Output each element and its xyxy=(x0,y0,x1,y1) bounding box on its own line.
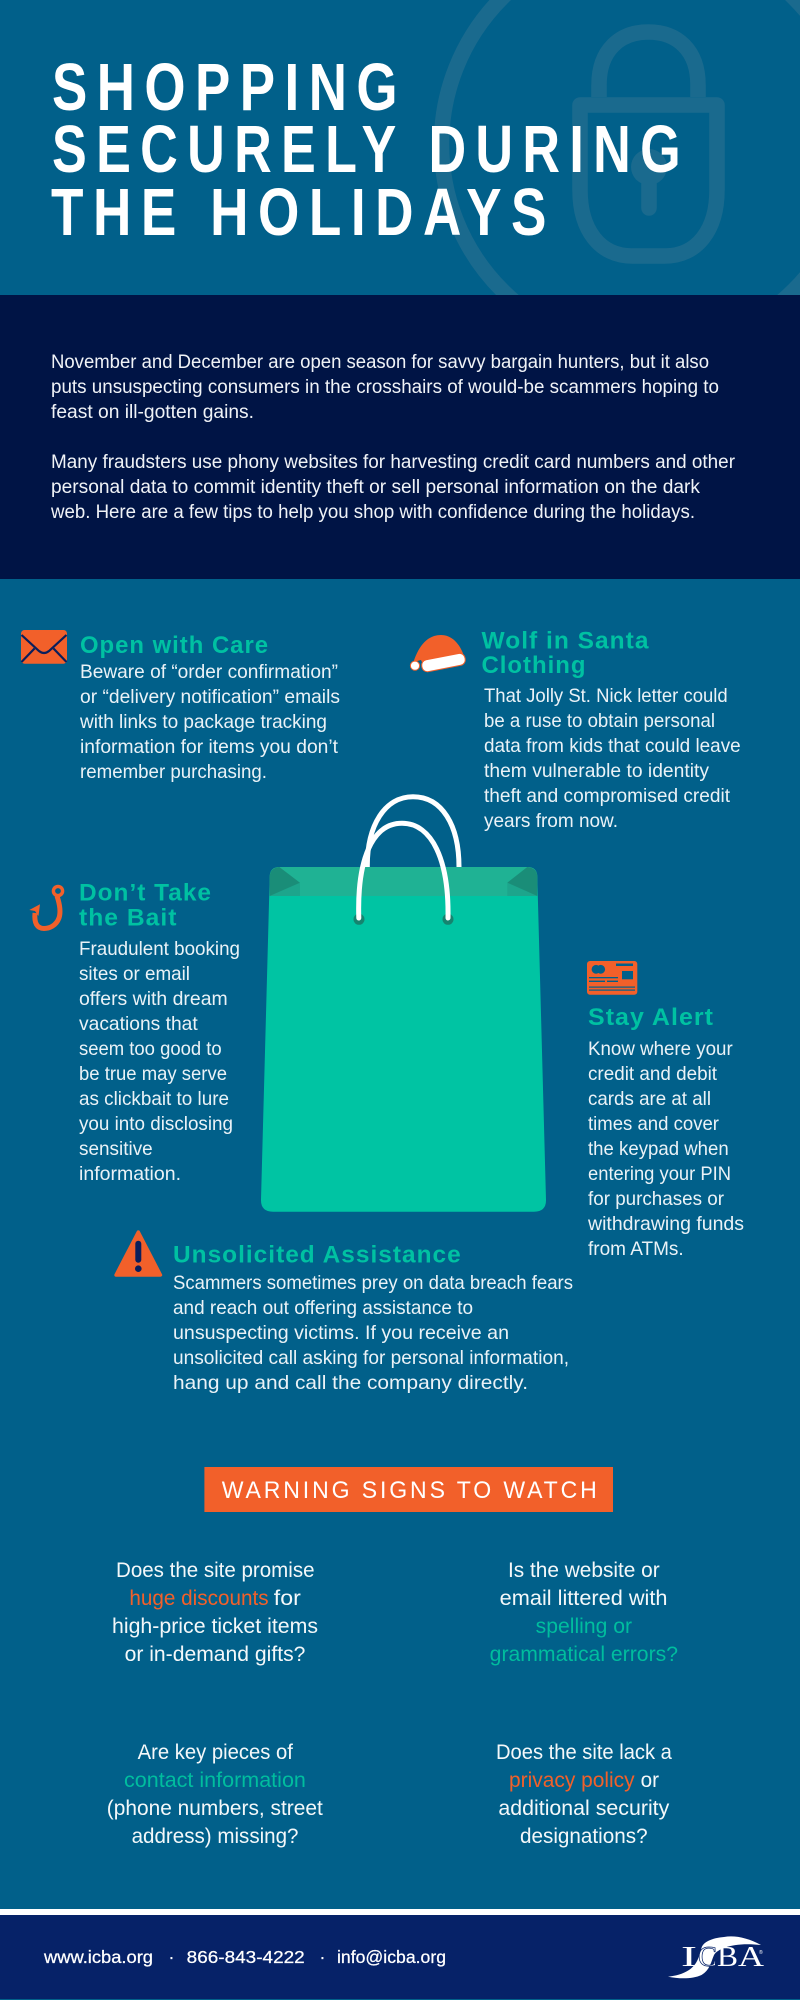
contact details: · xyxy=(168,1947,174,1967)
warning sign: huge discounts: high-price ticket items xyxy=(112,1615,318,1638)
text block: intro paragraph one: November and December are open season for savvy bargain hunters, but it also xyxy=(51,352,709,373)
text block: or “delivery notification” emails xyxy=(80,686,340,708)
title: SHOPPING xyxy=(52,50,407,125)
warning sign: privacy policy: Does the site lack a xyxy=(496,1741,672,1764)
text block: theft and compromised credit xyxy=(484,785,731,807)
text block: years from now. xyxy=(484,810,618,832)
warning sign: privacy policy: or xyxy=(641,1769,659,1792)
title xyxy=(51,50,690,250)
text block: be true may serve xyxy=(79,1063,227,1085)
text block: information for items you don’t xyxy=(80,736,339,758)
warning sign: huge discounts xyxy=(112,1559,318,1666)
text block: information. xyxy=(79,1163,181,1185)
text block: and reach out offering assistance to xyxy=(173,1297,473,1319)
warning sign: huge discounts: Does the site promise xyxy=(116,1559,314,1582)
warning sign: huge discounts: huge discounts xyxy=(129,1587,269,1610)
banner: warning signs to watch xyxy=(204,1467,613,1512)
text block: intro paragraph two xyxy=(50,452,736,523)
text block: offers with dream xyxy=(79,988,228,1010)
heading: Wolf in Santa xyxy=(482,628,650,654)
panel: introduction xyxy=(0,295,800,579)
heading xyxy=(482,628,650,679)
warning sign: spelling errors: spelling or xyxy=(536,1615,632,1638)
panel: unsolicited assistance xyxy=(116,1232,573,1394)
text block: intro paragraph two: Many fraudsters use phony websites for harvesting credit card numbers and other xyxy=(51,452,736,473)
warning sign: contact information: address) missing? xyxy=(132,1825,298,1848)
icon: warning triangle xyxy=(116,1232,160,1275)
text block: vacations that xyxy=(79,1013,198,1035)
warning sign: spelling errors: email littered with xyxy=(500,1587,668,1610)
text block: intro paragraph two: web. Here are a few tips to help you shop with confidence during the holidays. xyxy=(50,502,695,523)
warning sign: privacy policy: designations? xyxy=(520,1825,648,1848)
text block: for purchases or xyxy=(588,1188,724,1210)
text block xyxy=(484,685,741,832)
warning sign: privacy policy: additional security xyxy=(498,1797,670,1820)
contact details xyxy=(43,1947,446,1967)
panel: stay alert xyxy=(587,961,744,1260)
text block xyxy=(79,661,340,783)
heading: Open with Care xyxy=(80,632,269,659)
icon: envelope xyxy=(21,630,67,664)
warning sign: contact information: contact information xyxy=(124,1769,306,1792)
text block xyxy=(587,1038,744,1260)
text block: from ATMs. xyxy=(588,1238,684,1260)
panel: header xyxy=(0,0,800,350)
heading: Don’t Take xyxy=(79,880,212,907)
panel: wolf in santa clothing xyxy=(410,628,741,832)
banner: warning signs to watch: WARNING SIGNS TO WATCH xyxy=(222,1477,600,1504)
text block: intro paragraph two: personal data to commit identity theft or sell personal information on the dark xyxy=(51,477,700,498)
heading xyxy=(79,880,212,932)
warning sign: spelling errors: Is the website or xyxy=(508,1559,660,1582)
text block: Scammers sometimes prey on data breach fears xyxy=(173,1272,573,1294)
text block: sites or email xyxy=(79,963,190,985)
logo: ICBA xyxy=(668,1936,765,1978)
text block: cards are at all xyxy=(588,1088,711,1110)
icon: credit card xyxy=(587,961,637,995)
contact details: info@icba.org xyxy=(337,1947,446,1967)
text block: intro paragraph one: puts unsuspecting consumers in the crosshairs of would-be scammers hoping to xyxy=(51,377,719,398)
text block: unsuspecting victims. If you receive an xyxy=(173,1322,509,1344)
contact details: · xyxy=(320,1947,325,1967)
warning sign: spelling errors: grammatical errors? xyxy=(490,1643,678,1666)
logo: ICBA: B xyxy=(717,1942,738,1973)
text block: hang up and call the company directly. xyxy=(173,1372,528,1394)
text block: Fraudulent booking xyxy=(79,938,240,960)
text block: intro paragraph one xyxy=(51,352,719,423)
heading: Stay Alert xyxy=(588,1004,714,1031)
logo: ICBA: C xyxy=(698,1942,717,1973)
warning sign: huge discounts: or in-demand gifts? xyxy=(125,1643,305,1666)
title: THE HOLIDAYS xyxy=(51,175,556,250)
heading: Unsolicited Assistance xyxy=(173,1242,462,1269)
text block: them vulnerable to identity xyxy=(484,760,709,782)
heading: the Bait xyxy=(79,905,178,932)
text block: seem too good to xyxy=(79,1038,222,1060)
text block: the keypad when xyxy=(588,1138,729,1160)
text block: That Jolly St. Nick letter could xyxy=(484,685,728,707)
text block: remember purchasing. xyxy=(80,761,267,783)
text block: intro paragraph one: feast on ill-gotten gains. xyxy=(51,402,254,423)
logo: ICBA: I xyxy=(681,1942,697,1973)
panel: open with care xyxy=(21,630,340,783)
contact details: www.icba.org xyxy=(43,1947,153,1967)
warning sign: huge discounts: for xyxy=(274,1587,301,1610)
text block: data from kids that could leave xyxy=(484,735,741,757)
warning sign: privacy policy: privacy policy xyxy=(509,1769,635,1792)
text block xyxy=(79,938,240,1185)
warning sign: contact information xyxy=(107,1741,323,1848)
text block: withdrawing funds xyxy=(587,1213,744,1235)
logo: ICBA: ® xyxy=(759,1949,763,1956)
text block: unsolicited call asking for personal information, xyxy=(173,1347,569,1369)
text block: times and cover xyxy=(588,1113,719,1135)
text block: sensitive xyxy=(79,1138,153,1160)
text block: with links to package tracking xyxy=(79,711,327,733)
warning sign: contact information: Are key pieces of xyxy=(138,1741,293,1764)
icon: santa hat xyxy=(410,635,466,673)
panel: don't take the bait xyxy=(29,880,240,1185)
text block: Know where your xyxy=(588,1038,733,1060)
heading: Clothing xyxy=(482,652,586,679)
text block: you into disclosing xyxy=(79,1113,233,1135)
text block: entering your PIN xyxy=(588,1163,731,1185)
warning sign: spelling errors xyxy=(490,1559,678,1666)
logo: ICBA: A xyxy=(738,1942,765,1973)
warning sign: contact information: (phone numbers, street xyxy=(107,1797,323,1820)
warning sign: privacy policy xyxy=(496,1741,672,1848)
panel: footer xyxy=(0,1909,800,1999)
text block: as clickbait to lure xyxy=(79,1088,229,1110)
icon: fish hook xyxy=(29,886,63,928)
icon: shopping bag xyxy=(261,797,546,1212)
icon: padlock watermark xyxy=(442,0,800,350)
text block: be a ruse to obtain personal xyxy=(484,710,715,732)
text block: credit and debit xyxy=(588,1063,718,1085)
text block xyxy=(173,1272,573,1394)
text block: Beware of “order confirmation” xyxy=(80,661,338,683)
contact details: 866-843-4222 xyxy=(187,1947,305,1967)
